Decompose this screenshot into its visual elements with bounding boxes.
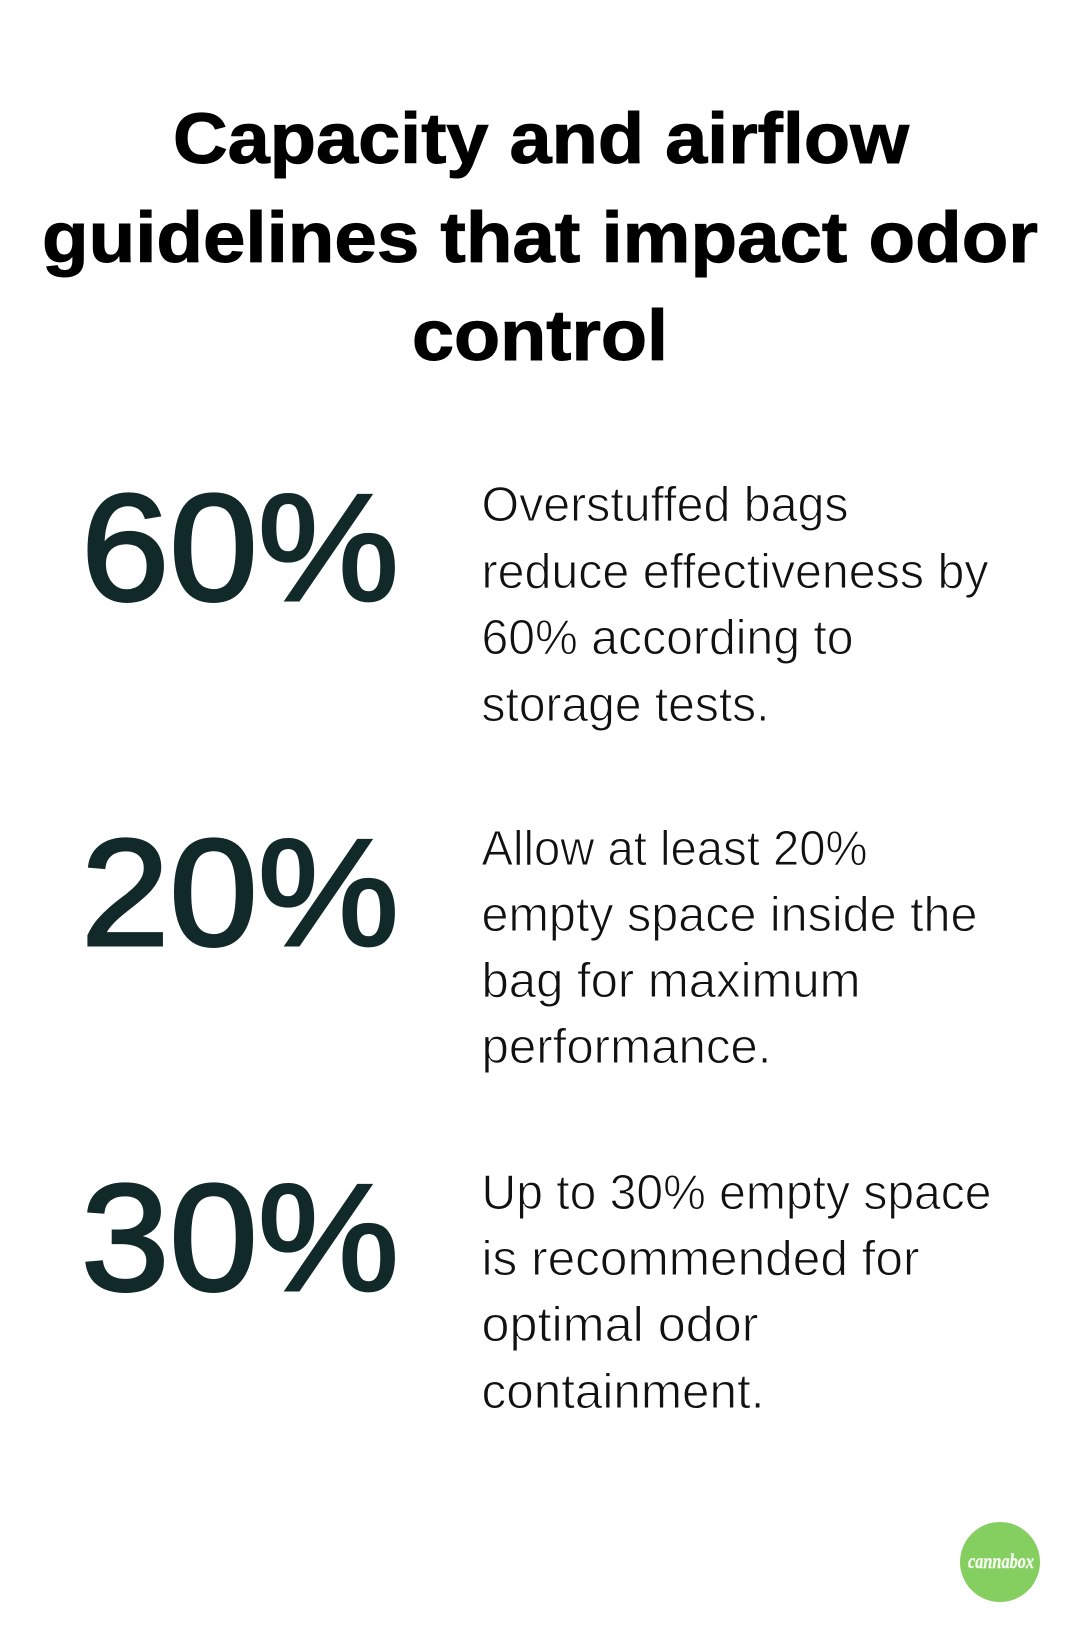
title: control xyxy=(412,297,668,376)
big number: 60%: 60% xyxy=(81,463,399,633)
stat row: 30% xyxy=(81,1153,992,1419)
description: recommended space: Up to 30% empty space xyxy=(482,1166,992,1220)
title: Capacity and airflow xyxy=(173,100,910,179)
description: empty space: performance. xyxy=(482,1020,772,1074)
description: empty space: Allow at least 20% xyxy=(482,822,868,876)
description: overstuffed bags: Overstuffed bags xyxy=(482,478,848,532)
description: empty space: empty space inside the xyxy=(482,888,978,942)
description: recommended space: containment. xyxy=(482,1365,764,1419)
description: empty space xyxy=(482,822,978,1074)
description: overstuffed bags: 60% according to xyxy=(482,611,854,665)
title xyxy=(42,100,1038,376)
description: overstuffed bags: reduce effectiveness by xyxy=(482,545,989,599)
big number: 30%: 30% xyxy=(81,1153,399,1323)
logo: cannabox badge xyxy=(960,1522,1040,1602)
description: overstuffed bags xyxy=(482,478,989,732)
stat row: 60% xyxy=(81,463,989,732)
stat row: 20% xyxy=(81,808,978,1074)
description: overstuffed bags: storage tests. xyxy=(482,678,770,732)
logo: cannabox badge: cannabox xyxy=(968,1549,1034,1573)
title: guidelines that impact odor xyxy=(42,199,1038,278)
description: empty space: bag for maximum xyxy=(482,954,860,1008)
description: recommended space xyxy=(482,1166,992,1419)
description: recommended space: optimal odor xyxy=(482,1298,758,1352)
big number: 20%: 20% xyxy=(81,808,399,978)
description: recommended space: is recommended for xyxy=(482,1232,920,1286)
